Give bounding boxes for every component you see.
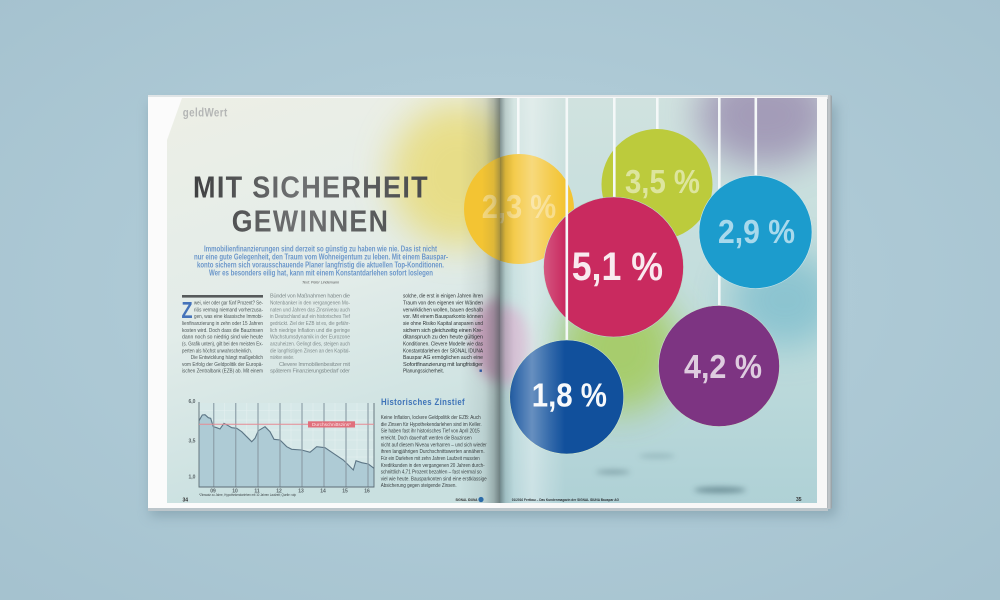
text column 2: in Deutschland auf ein historisches Tief [270, 314, 350, 320]
string over green [613, 98, 616, 198]
intro text: konto sichern sich vorausschauende Planer langfristig die aktuellen Top-Konditionen. [197, 260, 444, 270]
circle: 1,8 % royal blue [510, 340, 624, 454]
text column 2: späterem Finanzierungsbedarf oder [270, 369, 350, 375]
sidebar text: erreicht. Doch dauerhaft werden die Bauzinsen [381, 436, 472, 442]
footnote: *Zinssatz zu Jahre, Hypothekendarlehen mit 10 Jahren Laufzeit; Quelle: vdp [199, 493, 296, 497]
text column 1: (s. Grafik unten), gilt bei den meisten Ex- [182, 341, 263, 347]
circle: 5,1 % pink: 5,1 % [572, 245, 663, 289]
sidebar heading: Historisches Zinstief [381, 397, 466, 407]
book [148, 63, 840, 511]
average label: Durchschnittszins* [312, 422, 351, 427]
intro text [194, 244, 448, 278]
y axis labels: 6,0 [188, 399, 196, 405]
text column 2: naten und Jahren das Zinsniveau auch [270, 307, 350, 313]
sidebar text: die Zinsen für Hypothekendarlehen sind im Keller. [381, 422, 482, 428]
text column 3: sie ohne Risiko Kapital ansparen und [403, 321, 483, 327]
x axis labels: 13 [298, 488, 304, 494]
sidebar text: viel wie heute. Bausparkonten sind eine erstklassige [381, 476, 487, 482]
sidebar text: Für ein Darlehen mit zehn Jahren Laufzeit mussten [381, 456, 480, 462]
x axis labels: 15 [342, 488, 348, 494]
blurred teal glow [730, 252, 840, 348]
blurred purple glow [680, 98, 817, 184]
text column 2: gedrückt. Ziel der EZB ist es, die gefähr- [270, 321, 350, 327]
line chart: interest rate [188, 399, 374, 497]
text column 1: vom Erfolg der Geldpolitik der Europä- [182, 362, 263, 368]
title: GEWINNEN [232, 204, 389, 238]
title [193, 170, 429, 238]
text column 3: verwirklichen wollen, bauen deshalb [403, 307, 483, 313]
sidebar text: schnittlich 4,71 Prozent bezahlen – fast viermal so [381, 470, 482, 476]
text column 1: perten als höchst unwahrscheinlich. [182, 348, 252, 354]
text column 2: märkten wieder. [270, 355, 294, 361]
x axis labels: 11 [254, 488, 260, 494]
circle: 3,5 % green: 3,5 % [625, 163, 700, 200]
x axis labels: 09 [210, 488, 216, 494]
circle: 2,9 % blue: 2,9 % [718, 213, 795, 250]
y axis labels: 1,0 [188, 474, 196, 480]
text column 1: dann noch so niedrig sind wie heute [182, 335, 263, 341]
intro text: Wer es besonders eilig hat, kann mit einem Konstantdarlehen sofort loslegen [209, 268, 433, 278]
sidebar text: nicht auf diesem Niveau verharren – und sich wieder [381, 442, 487, 448]
text column 3: solche, die erst in einigen Jahren ihren [403, 294, 483, 300]
left folio: 34 [182, 498, 188, 504]
column rule [182, 295, 263, 298]
text column 3: Planungssicherheit. [403, 369, 444, 375]
spine lighting [482, 98, 565, 503]
sidebar text: Keine Inflation, lockere Geldpolitik der EZB: Auch [381, 415, 481, 421]
author: Text: Peter Lindemann [302, 280, 340, 284]
text column 3: Traum von den eigenen vier Wänden [403, 300, 483, 306]
right page [500, 98, 817, 503]
circle: 4,2 % purple [658, 306, 780, 426]
right footer: 01/2016 Fertbau – Das Kundenmagazin der SIGNAL IDUNA Bauspar AG [512, 498, 619, 502]
blurred yellow glow [390, 103, 526, 247]
text column 1: lienfinanzierung in zehn oder 15 Jahren [182, 321, 263, 327]
circle: 5,1 % pink [544, 197, 684, 337]
text column 1: wei, vier oder gar fünf Prozent? Se- [193, 300, 263, 306]
sidebar text: Sie haben fast ihr historisches Tief von April 2015 [381, 429, 480, 435]
book shadow [150, 104, 836, 516]
title: MIT SICHERHEIT [193, 170, 429, 204]
circle: 2,3 % yellow: 2,3 % [482, 188, 556, 225]
text column 2: lich niedrige Inflation und die geringe [270, 328, 350, 334]
area and curve [199, 415, 374, 487]
text column 2 [270, 294, 350, 375]
blurred pink glow [500, 302, 533, 388]
circle: 4,2 % purple: 4,2 % [684, 348, 762, 385]
blurred green glow [560, 288, 680, 412]
blurred pink glow [466, 294, 500, 386]
ground shadows [596, 454, 746, 493]
right folio: 35 [796, 497, 802, 503]
text column 1: Die Entwicklung hängt maßgeblich [191, 355, 263, 361]
text column 3: Konditionen. Clevere Modelle wie das [403, 341, 483, 347]
circle: 1,8 % royal blue: 1,8 % [532, 377, 607, 414]
x axis labels [210, 488, 370, 494]
text column 2: Clevere Immobilienbesitzer mit [279, 362, 350, 368]
text column 3: Sofortfinanzierung mit langfristiger [403, 362, 483, 368]
text column 3: Bauspar AG ermöglichen auch eine [403, 355, 483, 361]
left page [167, 98, 528, 503]
text column 2: Notenbanker in den vergangenen Mo- [270, 300, 350, 306]
text column 3: Konstantdarlehen der SIGNAL IDUNA [403, 348, 483, 354]
x axis labels: 14 [320, 488, 326, 494]
text column 2: anzuheizen. Gelingt dies, steigen auch [270, 341, 350, 347]
drop cap: Z [182, 297, 192, 323]
text column 3 [403, 294, 483, 375]
text column 1: gen, was eine klassische Immobi- [194, 314, 263, 320]
string over pink [566, 98, 568, 342]
y axis labels: 3,5 [188, 438, 196, 444]
y axis labels [188, 399, 196, 480]
circle: 3,5 % green [602, 129, 712, 240]
sidebar text: Kreditkunden in den vergangenen 20 Jahren durch- [381, 463, 485, 469]
circle: 2,3 % yellow [464, 154, 574, 264]
text column 2: die langfristigen Zinsen an den Kapital- [270, 348, 350, 354]
intro text: Immobilienfinanzierungen sind derzeit so günstig zu haben wie nie. Das ist nicht [204, 244, 437, 254]
text column 3: vor. Mit einem Bausparkonto können [403, 314, 483, 320]
page stack edge [826, 95, 832, 509]
text column 2: Bündel von Maßnahmen haben die [270, 294, 350, 300]
hanging strings behind [517, 98, 757, 308]
chart axes [199, 402, 374, 487]
average line [199, 423, 374, 425]
sidebar text: Absicherung gegen steigende Zinsen. [381, 483, 457, 489]
text column 3: ditanspruch zu den heute gültigen [403, 335, 483, 341]
publisher logo: SIGNAL IDUNA [456, 498, 478, 502]
x axis labels: 12 [276, 488, 282, 494]
text column 1 [182, 297, 263, 375]
average label [308, 421, 355, 428]
section label: geldWert [183, 106, 228, 120]
year gridlines [214, 403, 368, 487]
text column 3: sichern sich gleichzeitig einen Kre- [403, 328, 483, 334]
x axis labels: 10 [232, 488, 238, 494]
sidebar text: ihren langjährigen Durchschnittswerten annähern. [381, 449, 485, 455]
text column 2: Wachstumsdynamik in der Eurozone [270, 335, 350, 341]
sidebar text [381, 415, 487, 489]
circle: 2,9 % blue [699, 176, 812, 288]
text column 1: ischen Zentralbank (EZB) ab. Mit einem [182, 369, 263, 375]
x axis labels: 16 [364, 488, 370, 494]
intro text: nur eine gute Gelegenheit, den Traum vom Wohneigentum zu leben. Mit einem Bauspar- [194, 252, 448, 262]
text column 1: kosten wird. Doch dass die Bauzinsen [182, 328, 263, 334]
text column 1: riös vermag niemand vorherzusa- [194, 307, 263, 313]
